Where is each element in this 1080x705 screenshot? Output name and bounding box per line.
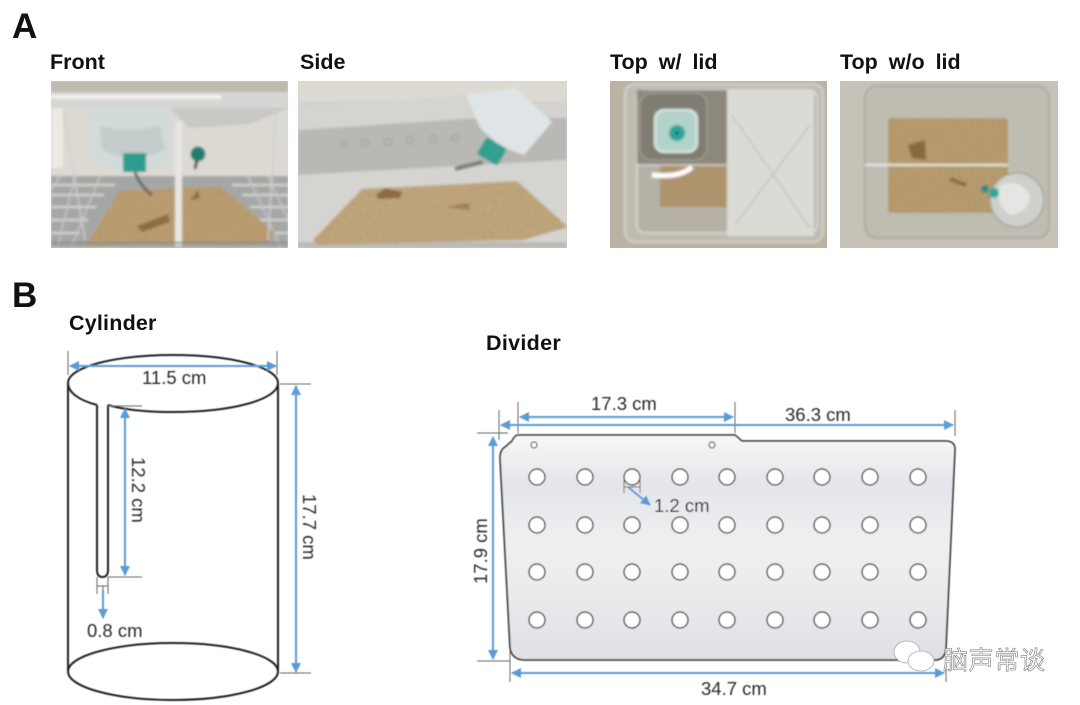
slot width dimension 0.8 cm xyxy=(87,590,143,641)
mounting holes xyxy=(531,442,715,448)
panel label B: B xyxy=(12,276,37,315)
dimension 17.3 cm: 17.3 cm xyxy=(591,393,657,414)
dimension 1.2 cm xyxy=(628,487,710,516)
photo: front view of cage xyxy=(51,81,288,248)
photo: top view without lid xyxy=(840,81,1058,248)
panel label A: A xyxy=(12,7,37,46)
perforation holes xyxy=(529,469,926,628)
diagram: divider plate xyxy=(470,393,955,699)
width dimension 11.5 cm: 11.5 cm xyxy=(142,367,206,388)
cylinder body xyxy=(68,383,278,671)
cylinder bottom rim xyxy=(68,643,278,700)
extension lines xyxy=(477,402,955,682)
dimension 36.3 cm: 36.3 cm xyxy=(785,404,851,425)
heading: Top w/o lid: Top w/o lid xyxy=(840,50,961,74)
height dimension 17.7 cm: 17.7 cm xyxy=(299,494,320,560)
photo: side view of cage xyxy=(298,81,568,248)
watermark: WeChat logo and account name xyxy=(894,641,1045,675)
diagram: cylinder xyxy=(68,351,320,700)
slot length dimension 12.2 cm: 12.2 cm xyxy=(128,457,149,523)
heading: Side: Side xyxy=(300,50,345,74)
dimension 17.9 cm: 17.9 cm xyxy=(470,518,491,584)
icon: chat bubbles xyxy=(894,641,934,671)
heading: Front: Front xyxy=(50,50,105,74)
heading: Top w/ lid: Top w/ lid xyxy=(610,50,718,74)
heading: Cylinder: Cylinder xyxy=(69,311,157,335)
dimension 34.7 cm: 34.7 cm xyxy=(701,678,767,699)
extension lines xyxy=(68,351,311,673)
slot width dimension 0.8 cm: 0.8 cm xyxy=(87,620,143,641)
dimension 1.2 cm: 1.2 cm xyxy=(654,495,710,516)
watermark text: 脑声常谈 xyxy=(943,647,1045,675)
cylinder top rim xyxy=(68,355,278,412)
photo: top view with lid xyxy=(610,81,827,248)
heading: Divider: Divider xyxy=(486,331,561,355)
plate outline xyxy=(500,435,955,660)
